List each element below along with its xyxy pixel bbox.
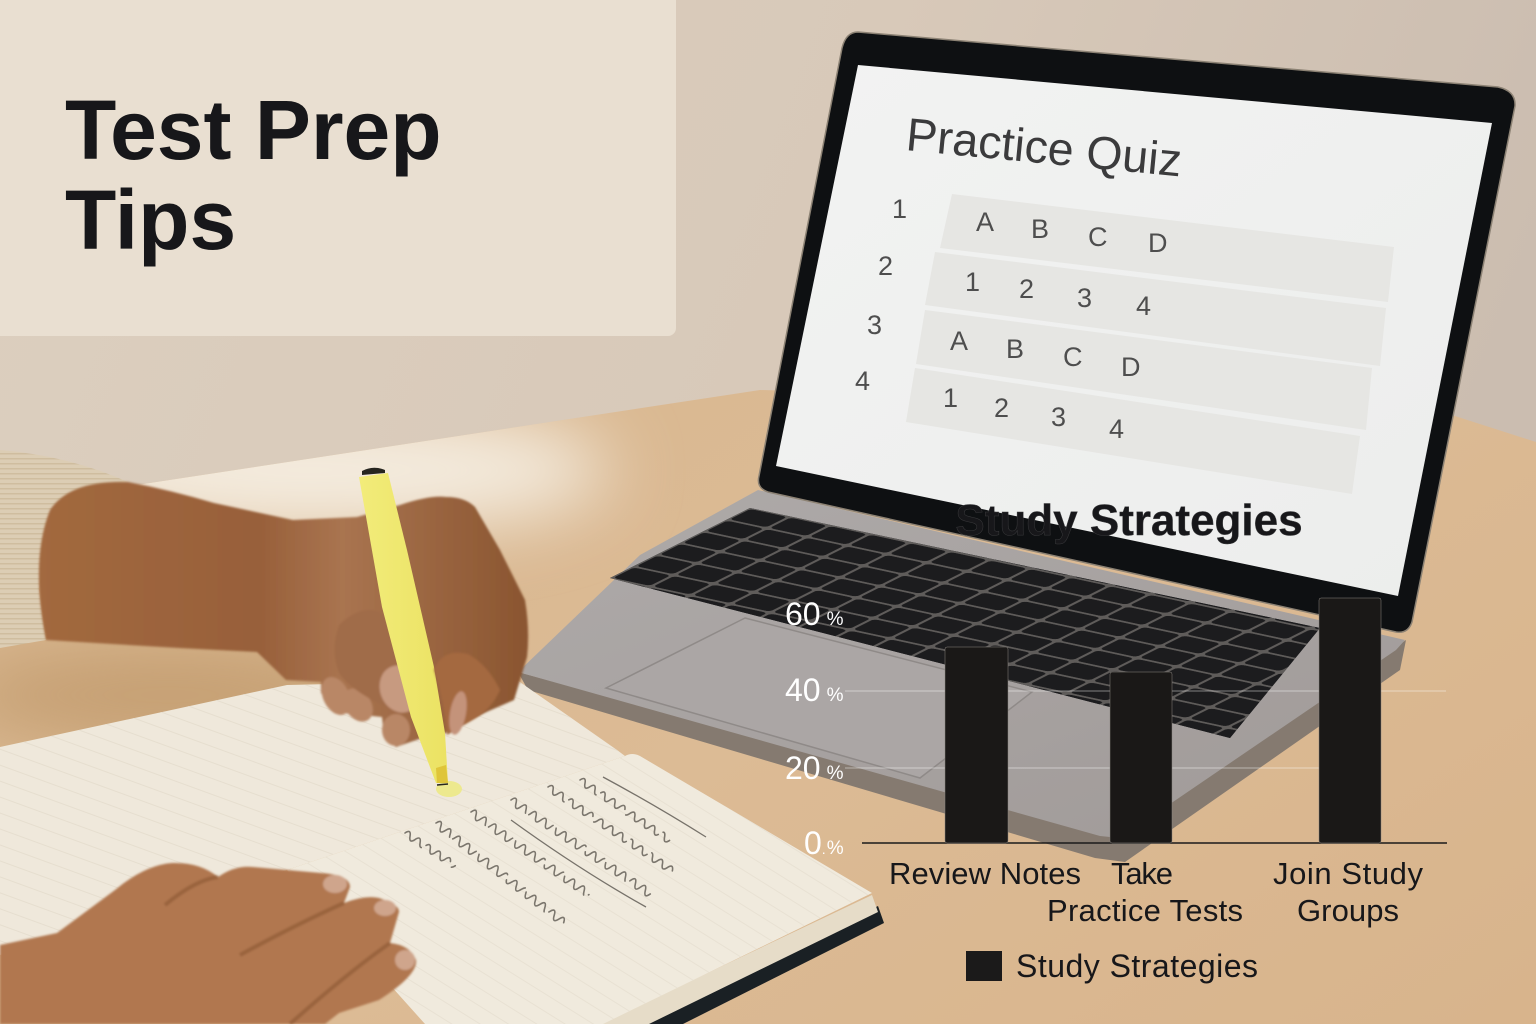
handwriting scribbles [403,777,674,926]
y axis labels: 20 % [785,750,844,786]
bar chart: study strategies [785,496,1447,984]
y axis labels: 40 % [785,672,844,708]
quiz numbers and answers: 1 [892,194,907,224]
legend: Study Strategies [1016,948,1258,984]
trackpad [606,618,1032,778]
x axis labels: Take [1111,856,1173,891]
quiz numbers and answers: 2 [1019,274,1034,304]
screen bezel [758,32,1515,632]
quiz numbers and answers: C [1063,342,1082,372]
x axis [862,842,1447,844]
quiz numbers and answers: 2 [878,251,893,281]
quiz numbers and answers [855,194,1168,444]
quiz numbers and answers: 4 [855,366,870,396]
laptop base edge [518,640,1406,862]
title panel [0,0,676,336]
fingernails [323,875,415,970]
left page [0,680,625,955]
screen display [776,65,1492,596]
quiz numbers and answers: 3 [1077,283,1092,313]
underlines [511,777,706,907]
quiz numbers and answers: A [976,207,994,237]
y axis labels: 0.% [804,825,844,861]
notebook [0,680,884,1024]
quiz numbers and answers: 1 [965,267,980,297]
sleeve [0,450,128,648]
quiz numbers and answers: 4 [1136,291,1151,321]
x axis labels: Practice Tests [1047,893,1243,928]
quiz numbers and answers: A [950,326,968,356]
right page [287,754,872,1024]
writing hand [39,482,528,747]
chart title: Study Strategies [955,496,1303,545]
quiz numbers and answers: 3 [1051,402,1066,432]
quiz numbers and answers: D [1121,352,1140,382]
lower hand [0,863,416,1024]
y axis labels [785,596,844,861]
x axis labels: Join Study [1273,856,1424,891]
title: Test Prep [65,83,442,177]
highlighter pen [359,468,448,785]
grid lines [845,691,1446,768]
quiz numbers and answers: D [1148,228,1168,258]
knuckle shading [165,877,390,1024]
quiz numbers and answers: B [1006,334,1024,364]
thumb [334,610,425,714]
quiz numbers and answers: 3 [867,310,882,340]
notebook cover edge [640,906,884,1024]
quiz numbers and answers: 4 [1109,414,1124,444]
curled fingertips [316,672,410,746]
x axis labels [889,856,1424,928]
quiz rows [906,194,1394,494]
page stack [600,895,878,1024]
x axis labels: Groups [1297,893,1399,928]
highlight mark [436,781,462,797]
quiz numbers and answers: B [1031,214,1049,244]
quiz numbers and answers: C [1088,222,1108,252]
quiz numbers and answers: 1 [943,383,958,413]
quiz numbers and answers: 2 [994,393,1009,423]
laptop [518,32,1515,862]
index finger [434,653,500,736]
title: Tips [65,173,236,267]
bars [945,647,1008,843]
y axis labels: 60 % [785,596,844,632]
wooden table [0,390,1536,1024]
quiz title: Practice Quiz [904,108,1184,186]
x axis labels: Review Notes [889,856,1081,891]
laptop base [518,490,1405,838]
thumb nail [373,660,427,718]
keyboard [610,508,1320,738]
